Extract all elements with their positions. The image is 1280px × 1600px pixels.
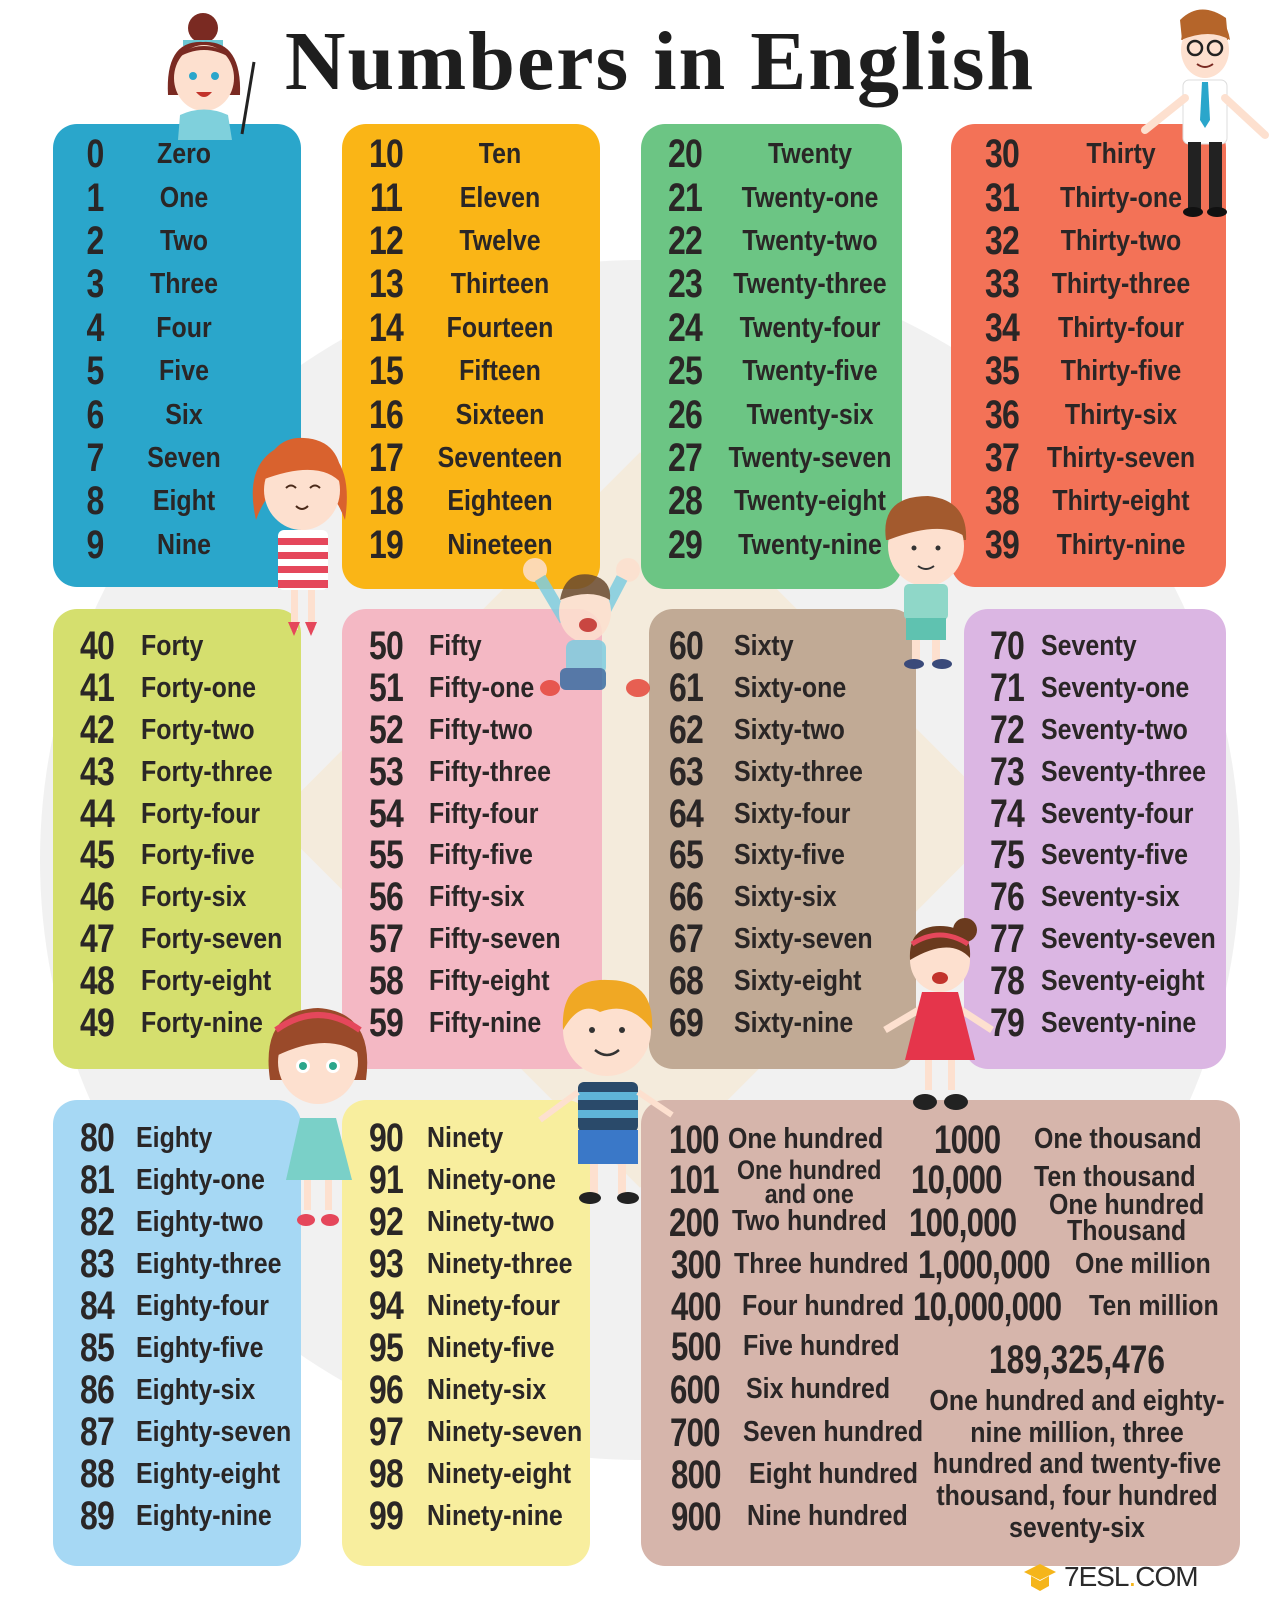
panel: 80-89: 89 — [80, 1494, 114, 1538]
panel: 40-49: 48 — [80, 959, 114, 1003]
thousands column: Ten million — [1089, 1290, 1219, 1322]
panel: 70-79: Seventy-five — [1041, 839, 1188, 871]
hundreds column: Nine hundred — [747, 1500, 908, 1532]
panel: 50-59: Fifty-three — [429, 756, 551, 788]
panel: 10-19: Twelve — [459, 225, 541, 257]
panel: 10-19: Fourteen — [447, 312, 553, 344]
panel: 60-69: Sixty-three — [734, 756, 863, 788]
panel: 40-49: Forty-three — [141, 756, 273, 788]
panel: 70-79 — [964, 609, 1226, 1069]
panel: 40-49: 42 — [80, 708, 114, 752]
panel: 50-59: Fifty-five — [429, 839, 533, 871]
panel: 0-9: 9 — [86, 523, 104, 567]
panel: 60-69: Sixty-four — [734, 798, 850, 830]
example number: One hundred and eighty- — [929, 1385, 1225, 1417]
title: Numbers in English — [285, 15, 1035, 108]
panel: 70-79: Seventy-two — [1041, 714, 1188, 746]
panel: 60-69: 61 — [669, 666, 703, 710]
panel: 30-39: Thirty-three — [1052, 268, 1190, 300]
panel: 50-59 — [342, 609, 602, 1069]
panel: 10-19: 11 — [370, 176, 402, 220]
panel: 50-59: 56 — [369, 875, 403, 919]
panel: 40-49: 46 — [80, 875, 114, 919]
panel: 70-79: 73 — [990, 750, 1024, 794]
panel: hundreds and large numbers — [641, 1100, 1240, 1566]
panel: 50-59: 52 — [369, 708, 403, 752]
character: boy with striped shirt — [540, 980, 672, 1204]
hundreds column: Three hundred — [734, 1248, 909, 1280]
panel: 40-49: 41 — [80, 666, 114, 710]
panel: 50-59: 50 — [369, 624, 403, 668]
panel: 30-39: Thirty-seven — [1047, 442, 1195, 474]
panel: 60-69: 63 — [669, 750, 703, 794]
panel: 80-89: 85 — [80, 1326, 114, 1370]
thousands column: Ten thousand — [1034, 1161, 1196, 1193]
panel: 80-89: Eighty-six — [136, 1374, 255, 1406]
panel: 40-49: Forty-four — [141, 798, 260, 830]
panel: 90-99: 96 — [369, 1368, 403, 1412]
panel: 20-29: 26 — [668, 393, 702, 437]
panel: 10-19: 13 — [369, 262, 403, 306]
panel: 50-59: Fifty-eight — [429, 965, 550, 997]
panel: 10-19: Sixteen — [456, 399, 544, 431]
panel: 30-39: 36 — [985, 393, 1019, 437]
panel: 40-49: 43 — [80, 750, 114, 794]
logo: 7ESL.COM — [1064, 1561, 1198, 1592]
panel: 30-39: 31 — [985, 176, 1019, 220]
panel: 10-19: 19 — [369, 523, 403, 567]
panel: 90-99: Ninety-three — [427, 1248, 573, 1280]
panel: 80-89 — [53, 1100, 301, 1566]
panel: 40-49: Forty-one — [141, 672, 256, 704]
panel: 80-89: Eighty-four — [136, 1290, 269, 1322]
character: girl in red dress — [885, 918, 992, 1110]
hundreds column: 500 — [671, 1325, 721, 1369]
panel: 90-99: 93 — [369, 1242, 403, 1286]
panel: 0-9: Seven — [147, 442, 221, 474]
panel: 50-59: Fifty-seven — [429, 923, 561, 955]
panel: 20-29: 20 — [668, 132, 702, 176]
thousands column: 100,000 — [909, 1201, 1016, 1245]
panel: 60-69: Sixty-six — [734, 881, 837, 913]
panel: 0-9: 1 — [86, 176, 104, 220]
panel: 20-29: Twenty-three — [733, 268, 887, 300]
panel: 50-59: Fifty-one — [429, 672, 534, 704]
example number — [929, 1338, 1225, 1544]
character: girl in teal dress — [269, 1008, 367, 1226]
panel: 20-29: 24 — [668, 306, 702, 350]
panel: 50-59: 57 — [369, 917, 403, 961]
panel: 30-39: Thirty — [1086, 138, 1156, 170]
panel: 50-59: 58 — [369, 959, 403, 1003]
panel: 80-89: Eighty-seven — [136, 1416, 291, 1448]
panel: 10-19: 17 — [369, 436, 403, 480]
panel: 70-79: 72 — [990, 708, 1024, 752]
panel: 70-79: 78 — [990, 959, 1024, 1003]
panel: 20-29: 22 — [668, 219, 702, 263]
panel: 60-69: Sixty-nine — [734, 1007, 853, 1039]
panel: 80-89: 80 — [80, 1116, 114, 1160]
character: man with glasses — [1145, 9, 1265, 217]
panel: 90-99: 91 — [369, 1158, 403, 1202]
panel: 60-69 — [649, 609, 916, 1069]
panel: 90-99: Ninety — [427, 1122, 503, 1154]
panel: 50-59: Fifty-four — [429, 798, 538, 830]
panel: 20-29: Twenty-nine — [738, 529, 882, 561]
character: jumping boy — [523, 558, 650, 697]
panel: 70-79: Seventy-nine — [1041, 1007, 1196, 1039]
thousands column: 10,000 — [911, 1158, 1002, 1202]
panel: 0-9: Nine — [157, 529, 211, 561]
panel: 10-19: Eighteen — [447, 485, 553, 517]
panel: 0-9: Five — [159, 355, 209, 387]
panel: 70-79: 70 — [990, 624, 1024, 668]
panel: 80-89: Eighty-five — [136, 1332, 263, 1364]
panel: 70-79: Seventy-one — [1041, 672, 1189, 704]
hundreds column: One hundred — [737, 1155, 881, 1185]
thousands column: Thousand — [1067, 1215, 1186, 1247]
panel: 30-39: 33 — [985, 262, 1019, 306]
panel: 80-89: Eighty-nine — [136, 1500, 272, 1532]
panel: 20-29: Twenty-five — [742, 355, 878, 387]
hundreds column: Six hundred — [746, 1373, 890, 1405]
panel: 20-29 — [641, 124, 902, 589]
panel: 90-99: 90 — [369, 1116, 403, 1160]
panel: 50-59: 54 — [369, 792, 403, 836]
panel: 80-89: 83 — [80, 1242, 114, 1286]
panel: 40-49: 45 — [80, 833, 114, 877]
thousands column: One million — [1075, 1248, 1211, 1280]
hundreds column: 400 — [671, 1285, 721, 1329]
panel: 30-39 — [951, 124, 1226, 587]
thousands column: 1000 — [934, 1118, 1000, 1162]
hundreds column: 800 — [671, 1453, 721, 1497]
hundreds column: 700 — [670, 1411, 720, 1455]
panel: 20-29: Twenty-six — [746, 399, 874, 431]
panel: 40-49: 40 — [80, 624, 114, 668]
panel: 30-39: 30 — [985, 132, 1019, 176]
panel: 30-39: 38 — [985, 479, 1019, 523]
panel: 20-29: 27 — [668, 436, 702, 480]
panel: 20-29: 23 — [668, 262, 702, 306]
panel: 20-29: Twenty-seven — [728, 442, 892, 474]
panel: 60-69: Sixty-one — [734, 672, 846, 704]
panel: 0-9: Three — [150, 268, 218, 300]
panel: 60-69: 66 — [669, 875, 703, 919]
panel: 30-39: Thirty-one — [1060, 182, 1182, 214]
panel: 20-29: 25 — [668, 349, 702, 393]
panel: 70-79: 75 — [990, 833, 1024, 877]
panel: 90-99: Ninety-eight — [427, 1458, 571, 1490]
panel: 0-9: 2 — [86, 219, 104, 263]
panel: 50-59: 59 — [369, 1001, 403, 1045]
panel: 0-9 — [53, 124, 301, 587]
panel: 50-59: Fifty-six — [429, 881, 525, 913]
panel: 60-69: Sixty-five — [734, 839, 845, 871]
panel: 70-79: Seventy — [1041, 630, 1137, 662]
panel: 70-79: 71 — [990, 666, 1024, 710]
panel: 0-9: One — [160, 182, 208, 214]
panel: 80-89: 82 — [80, 1200, 114, 1244]
panel: 0-9: Eight — [153, 485, 215, 517]
panel: 30-39: 34 — [985, 306, 1019, 350]
panel: 10-19: 16 — [369, 393, 403, 437]
panel: 0-9: 3 — [86, 262, 104, 306]
panel: 80-89: 88 — [80, 1452, 114, 1496]
example number: 189,325,476 — [989, 1338, 1165, 1382]
panel: 70-79: 77 — [990, 917, 1024, 961]
panel: 80-89: 81 — [80, 1158, 114, 1202]
panel: 50-59: 51 — [369, 666, 403, 710]
panel: 20-29: 21 — [668, 176, 702, 220]
panel: 10-19: 15 — [369, 349, 403, 393]
hundreds column: Eight hundred — [749, 1458, 918, 1490]
panel: 10-19: Seventeen — [438, 442, 562, 474]
panel: 40-49: Forty-seven — [141, 923, 282, 955]
hundreds column: 300 — [671, 1243, 721, 1287]
thousands column: 1,000,000 — [918, 1243, 1050, 1287]
hundreds column: 100 — [669, 1118, 719, 1162]
panel: 70-79: Seventy-three — [1041, 756, 1206, 788]
panel: 60-69: Sixty-seven — [734, 923, 873, 955]
panel: 50-59: Fifty-nine — [429, 1007, 541, 1039]
panel: 90-99: Ninety-six — [427, 1374, 546, 1406]
panel: 30-39: Thirty-two — [1061, 225, 1181, 257]
panel: 50-59: 55 — [369, 833, 403, 877]
panel: 0-9: 0 — [86, 132, 104, 176]
panel: 60-69: Sixty — [734, 630, 794, 662]
panel: 30-39: 37 — [985, 436, 1019, 480]
panel: 90-99: Ninety-two — [427, 1206, 554, 1238]
hundreds column: 600 — [670, 1368, 720, 1412]
hundreds column: 200 — [669, 1201, 719, 1245]
panel: 80-89: 87 — [80, 1410, 114, 1454]
panel: 10-19: 10 — [369, 132, 403, 176]
panel: 90-99: Ninety-four — [427, 1290, 560, 1322]
panel: 20-29: 28 — [668, 479, 702, 523]
panel: 90-99: 99 — [369, 1494, 403, 1538]
panel: 60-69: 60 — [669, 624, 703, 668]
panel: 0-9: 7 — [86, 436, 104, 480]
panel: 10-19: 18 — [369, 479, 403, 523]
panel: 10-19: 14 — [369, 306, 403, 350]
character: teacher girl — [168, 13, 254, 140]
thousands column: One thousand — [1034, 1123, 1202, 1155]
panel: 40-49 — [53, 609, 301, 1069]
panel: 20-29: Twenty-eight — [734, 485, 886, 517]
panel: 60-69: 64 — [669, 792, 703, 836]
example number: nine million, three — [970, 1417, 1184, 1449]
panel: 70-79: 76 — [990, 875, 1024, 919]
panel: 30-39: Thirty-four — [1058, 312, 1184, 344]
panel: 90-99: Ninety-seven — [427, 1416, 582, 1448]
panel: 70-79: Seventy-four — [1041, 798, 1193, 830]
panel: 40-49: Forty-eight — [141, 965, 271, 997]
panel: 0-9: Two — [160, 225, 208, 257]
panel: 0-9: Zero — [157, 138, 211, 170]
panel: 20-29: 29 — [668, 523, 702, 567]
panel: 40-49: Forty-two — [141, 714, 255, 746]
panel: 90-99: Ninety-one — [427, 1164, 556, 1196]
hundreds column: Two hundred — [732, 1205, 887, 1237]
hundreds column: Five hundred — [743, 1330, 900, 1362]
panel: 50-59: Fifty-two — [429, 714, 533, 746]
hundreds column: One hundred — [728, 1123, 883, 1155]
panel: 60-69: 67 — [669, 917, 703, 961]
panel: 70-79: 74 — [990, 792, 1024, 836]
panel: 40-49: Forty — [141, 630, 203, 662]
panel: 10-19 — [342, 124, 600, 589]
hundreds column — [669, 1118, 923, 1539]
panel: 90-99: 92 — [369, 1200, 403, 1244]
panel: 10-19: Eleven — [460, 182, 540, 214]
panel: 60-69: 69 — [669, 1001, 703, 1045]
panel: 0-9: Six — [165, 399, 203, 431]
panel: 40-49: 49 — [80, 1001, 114, 1045]
panel: 40-49: 47 — [80, 917, 114, 961]
panel: 10-19: 12 — [369, 219, 403, 263]
panel: 30-39: 32 — [985, 219, 1019, 263]
panel: 40-49: Forty-six — [141, 881, 246, 913]
panel: 30-39: 39 — [985, 523, 1019, 567]
panel: 10-19: Nineteen — [447, 529, 553, 561]
panel: 30-39: Thirty-six — [1065, 399, 1177, 431]
panel: 60-69: Sixty-two — [734, 714, 845, 746]
panel: 10-19: Thirteen — [451, 268, 549, 300]
panel: 80-89: Eighty — [136, 1122, 212, 1154]
panel: 90-99: Ninety-nine — [427, 1500, 563, 1532]
panel: 50-59: 53 — [369, 750, 403, 794]
character: girl with red hair — [253, 438, 347, 636]
panel: 90-99 — [342, 1100, 590, 1566]
hundreds column: 101 — [669, 1158, 719, 1202]
panel: 20-29: Twenty — [768, 138, 852, 170]
panel: 0-9: Four — [156, 312, 212, 344]
panel: 10-19: Ten — [479, 138, 521, 170]
panel: 60-69: 68 — [669, 959, 703, 1003]
panel: 50-59: Fifty — [429, 630, 482, 662]
panel: 0-9: 4 — [86, 306, 104, 350]
thousands column — [909, 1118, 1219, 1329]
hundreds column: Seven hundred — [743, 1416, 923, 1448]
panel: 90-99: Ninety-five — [427, 1332, 555, 1364]
panel: 90-99: 95 — [369, 1326, 403, 1370]
panel: 0-9: 6 — [86, 393, 104, 437]
panel: 20-29: Twenty-four — [740, 312, 880, 344]
panel: 90-99: 98 — [369, 1452, 403, 1496]
hundreds column: Four hundred — [742, 1290, 904, 1322]
hundreds column: and one — [765, 1179, 854, 1209]
panel: 60-69: 65 — [669, 833, 703, 877]
panel: 70-79: Seventy-seven — [1041, 923, 1216, 955]
panel: 60-69: Sixty-eight — [734, 965, 861, 997]
panel: 20-29: Twenty-two — [742, 225, 878, 257]
panel: 40-49: Forty-five — [141, 839, 255, 871]
panel: 0-9: 8 — [86, 479, 104, 523]
panel: 80-89: Eighty-three — [136, 1248, 282, 1280]
panel: 30-39: 35 — [985, 349, 1019, 393]
panel: 0-9: 5 — [86, 349, 104, 393]
panel: 30-39: Thirty-nine — [1057, 529, 1185, 561]
panel: 10-19: Fifteen — [459, 355, 541, 387]
panel: 70-79: Seventy-eight — [1041, 965, 1205, 997]
example number: hundred and twenty-five — [933, 1448, 1221, 1480]
example number: seventy-six — [1009, 1512, 1145, 1544]
panel: 90-99: 97 — [369, 1410, 403, 1454]
thousands column: One hundred — [1049, 1189, 1204, 1221]
panel: 40-49: Forty-nine — [141, 1007, 263, 1039]
panel: 80-89: 86 — [80, 1368, 114, 1412]
hundreds column: 900 — [671, 1495, 721, 1539]
panel: 80-89: 84 — [80, 1284, 114, 1328]
example number: thousand, four hundred — [936, 1480, 1218, 1512]
thousands column: 10,000,000 — [913, 1285, 1061, 1329]
panel: 20-29: Twenty-one — [742, 182, 878, 214]
panel: 30-39: Thirty-eight — [1052, 485, 1190, 517]
panel: 40-49: 44 — [80, 792, 114, 836]
panel: 70-79: 79 — [990, 1001, 1024, 1045]
panel: 90-99: 94 — [369, 1284, 403, 1328]
panel: 80-89: Eighty-one — [136, 1164, 265, 1196]
panel: 80-89: Eighty-eight — [136, 1458, 280, 1490]
panel: 70-79: Seventy-six — [1041, 881, 1180, 913]
character: boy right — [885, 496, 966, 669]
panel: 30-39: Thirty-five — [1061, 355, 1181, 387]
panel: 80-89: Eighty-two — [136, 1206, 263, 1238]
panel: 60-69: 62 — [669, 708, 703, 752]
